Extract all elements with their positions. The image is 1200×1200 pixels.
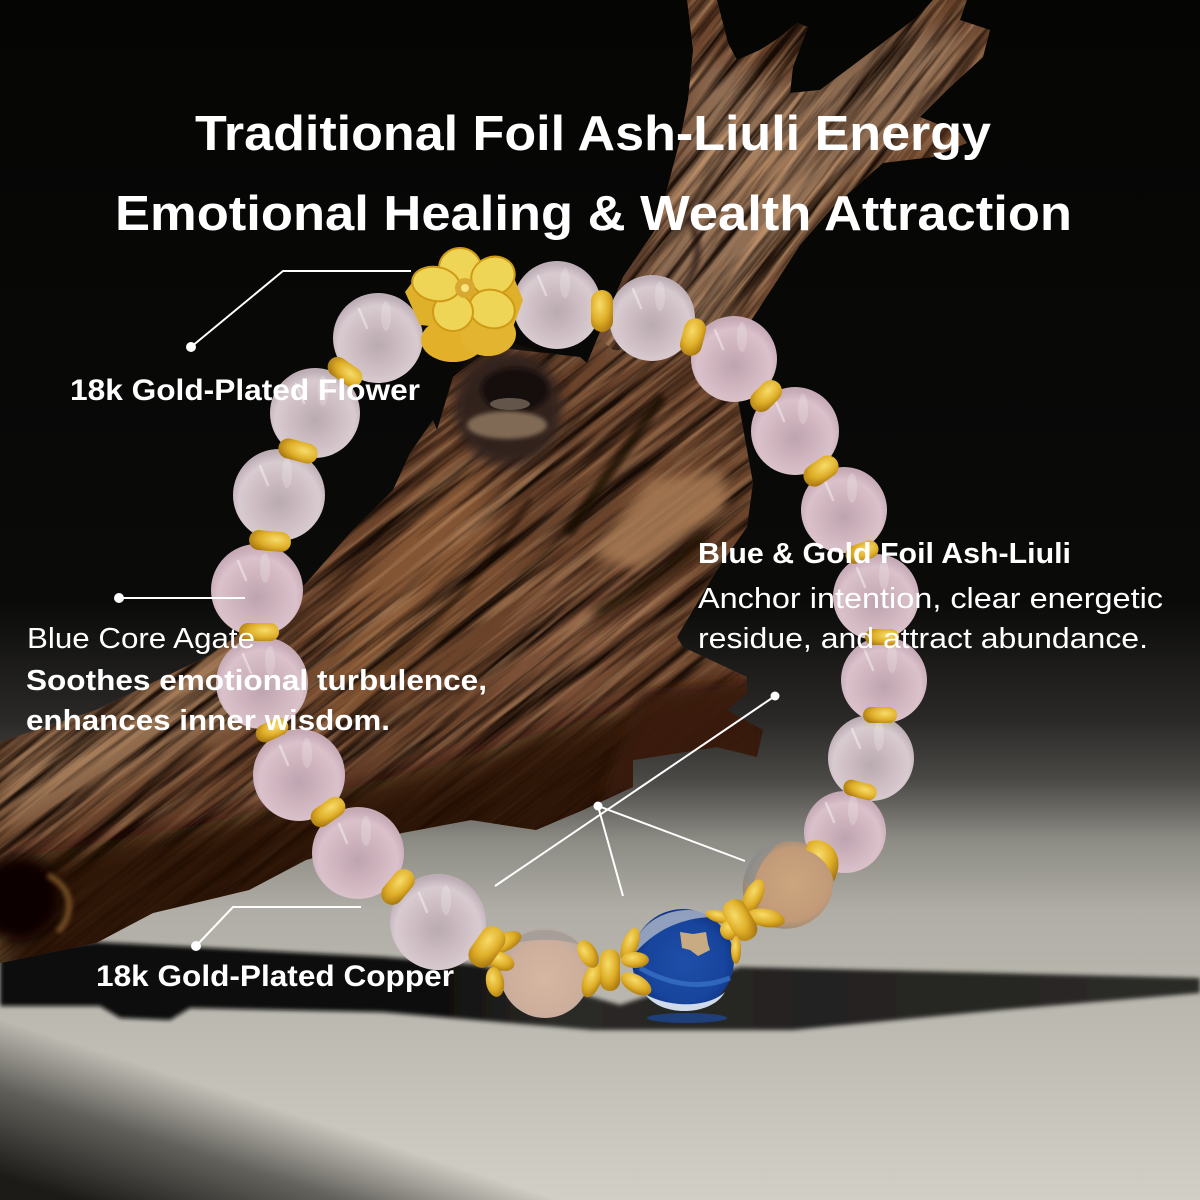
callout: 18k gold-plated flower [70, 271, 420, 407]
wood shade and lit knob [0, 470, 780, 1000]
callout: blue and gold foil ash-liuli: Anchor intention, clear energetic [698, 583, 1163, 615]
callout: blue core agate: Blue Core Agate [27, 623, 255, 655]
wood knot [454, 350, 562, 466]
title: Emotional Healing & Wealth Attraction [115, 187, 1072, 241]
callout: 18k gold-plated copper: 18k Gold-Plated Copper [96, 960, 454, 993]
gold flower charm [405, 248, 523, 362]
foil beads [500, 825, 849, 1018]
wood light patches [0, 30, 980, 835]
rose agate beads [211, 261, 927, 970]
gold caps [464, 840, 839, 1000]
callout: 18k gold-plated flower: 18k Gold-Plated Flower [70, 374, 420, 407]
callout: 18k gold-plated copper [96, 907, 454, 993]
blue foil bead [632, 909, 734, 1023]
callout: blue and gold foil ash-liuli [495, 538, 1163, 896]
callout: blue and gold foil ash-liuli: Blue & Gold Foil Ash-Liuli [698, 538, 1071, 570]
callout: blue core agate: Soothes emotional turbulence, [26, 665, 487, 697]
callout: blue core agate [26, 593, 487, 737]
left broken end [0, 856, 69, 940]
title [115, 107, 1072, 241]
driftwood [0, 0, 990, 963]
callout: blue and gold foil ash-liuli: residue, and attract abundance. [698, 623, 1148, 655]
title: Traditional Foil Ash-Liuli Energy [195, 107, 991, 161]
gold spacers [239, 290, 899, 909]
callout: blue core agate: enhances inner wisdom. [26, 705, 390, 737]
bracelet [211, 248, 927, 1023]
